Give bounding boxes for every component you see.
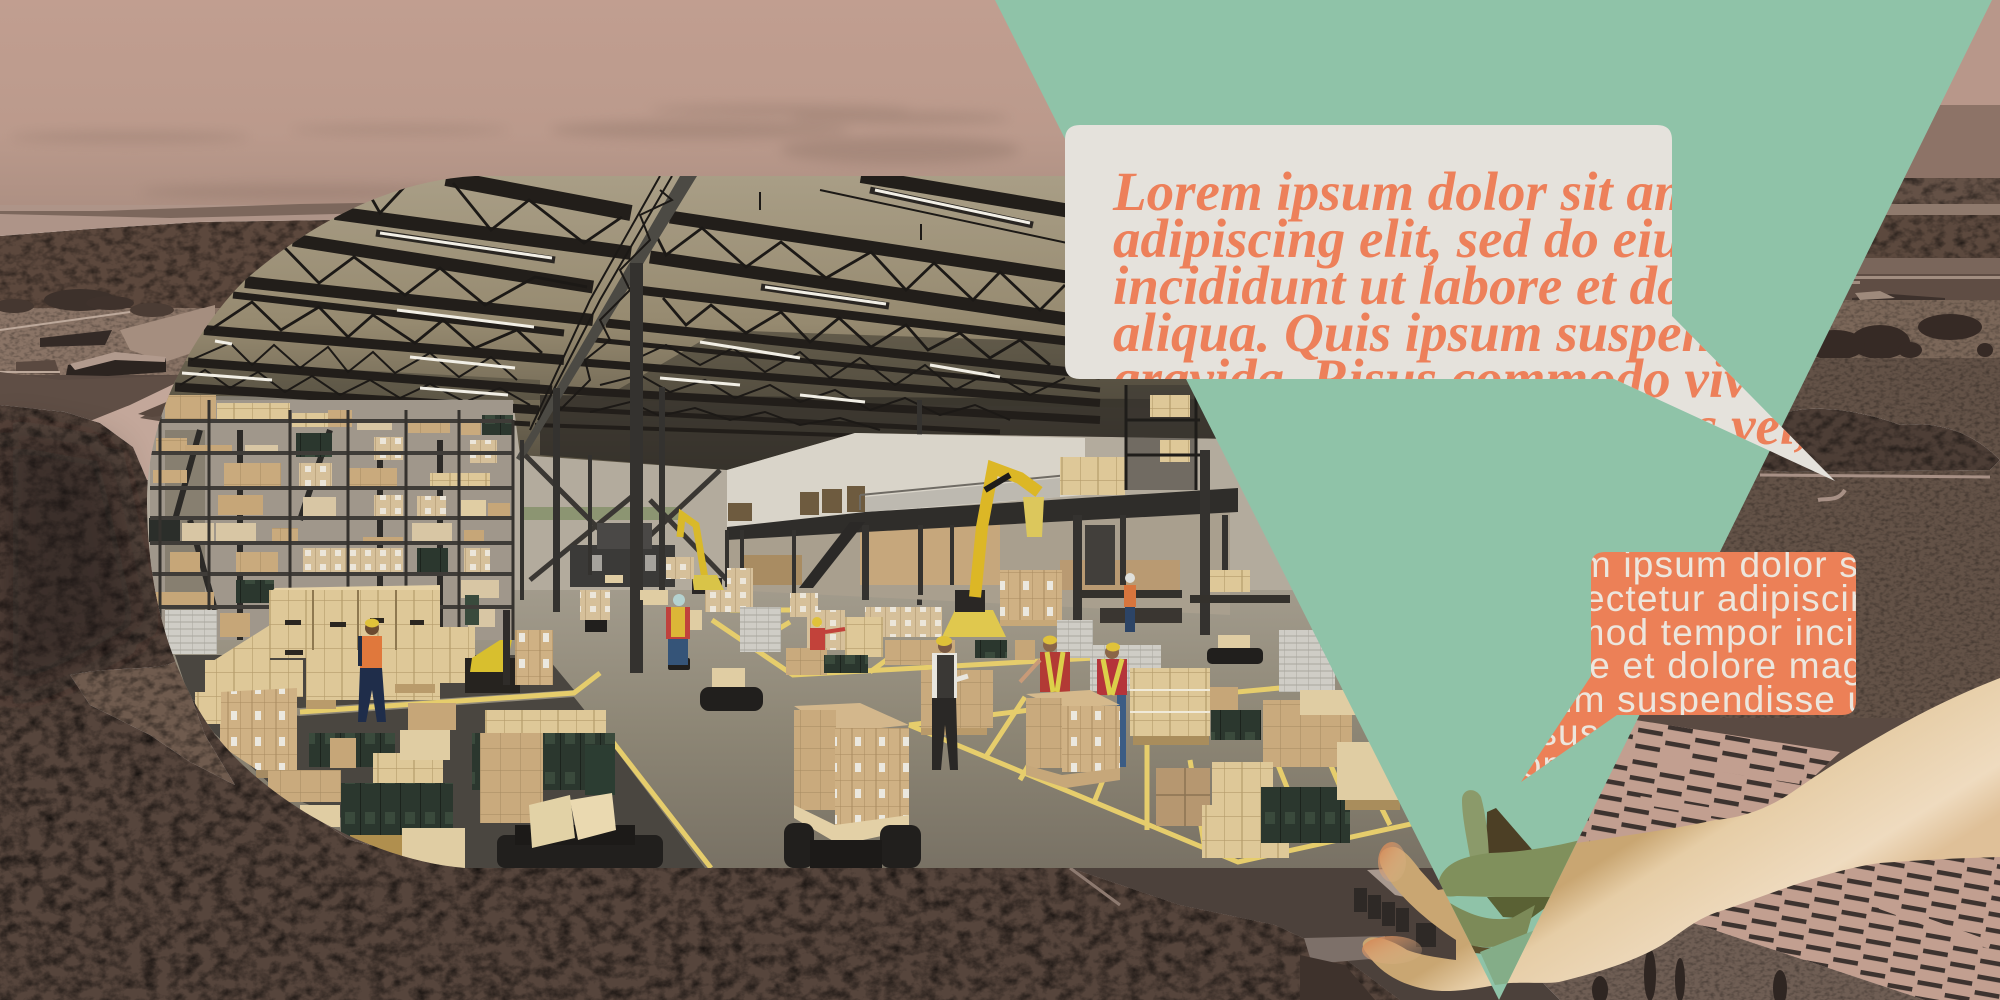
robot arm large [942,468,1044,637]
mezzanine deck [727,488,1238,540]
mezzanine lower bay [727,505,1230,615]
sky with clouds [0,0,2000,220]
left: wooded mid-ground [0,220,330,345]
back wall bracing, window strip and containers [520,455,727,587]
mezzanine wall [727,433,1085,528]
bubble serif text, clipped: adipiscing elit, sed do eiusmod tempor [1113,208,1975,269]
lower finger [1450,903,1535,947]
yellow lane edge [609,737,711,868]
left pale pallet [195,688,297,778]
bubble sans text, clipped: eiusmod tempor incididunt [1501,612,1963,653]
right: sky and hazy distance [1800,0,2000,179]
left: fields and farm buildings [0,289,260,376]
bubble serif text, clipped: aliqua. Quis ipsum suspendisse ultrices [1113,302,2000,363]
workstation tables [1080,570,1290,623]
worker with orange vest [358,618,386,722]
right: distant hills and tree lines [1800,178,2000,261]
shadow under lower finger [1462,938,1525,954]
shadow between thumb and fingers [1487,897,1560,919]
mezzanine railing and stored boxes [860,385,1200,512]
second big pallet with worker behind [1026,642,1127,788]
bubble sans text, clipped: Risus commodo [1501,712,1782,753]
right: clumps of trees [1805,314,1993,360]
bottom: yard and road with trucks [1070,868,1560,1000]
rack posts [160,400,513,640]
worker in red with yellow vest [1020,636,1070,692]
ceiling [140,176,1300,470]
rack shelves [150,421,513,607]
left and bottom: dark forest [0,405,1400,1000]
bubble sans text, clipped: Lorem ipsum dolor sit amet, [1501,544,1990,585]
raised finger [1462,790,1489,857]
back wall [147,380,1292,610]
left: lake and distant hills [0,202,420,245]
bubble sans text, clipped: ipsum suspendisse ultrices [1501,679,1974,720]
lane boxes and crates [268,703,615,868]
web of hand [1486,808,1535,862]
yellow floor markings [300,610,1420,862]
roof beams [165,176,1100,437]
left: forest clearing [70,660,235,785]
centre worker on cart [666,594,690,670]
orange speech bubble [1501,544,2000,785]
robot with cream boxes [497,793,663,868]
worker pointing [810,617,845,650]
bubble sans text, clipped: commodo viverra [1501,744,1803,785]
dark lane area [190,697,705,868]
right: scrub field [1720,358,2000,718]
bubble serif text, clipped: Lorem ipsum dolor sit amet, consectetur [1112,161,2000,222]
storage racks [149,395,513,640]
small robot far right [1207,635,1263,664]
centre crate groups [921,640,1005,735]
small robot arm [680,515,724,594]
facade trees [1592,949,1787,1000]
dark lane under pallets [175,655,574,708]
roof lights [182,190,1033,402]
stairs [799,532,857,588]
light speech bubble [1065,125,2000,481]
fingertip shading [1362,842,1422,964]
left: forest shadow [0,430,150,700]
hand seen through triangle [1438,790,1600,985]
centre pallets and sacks [740,607,1335,692]
yellow wrapped pallet [1130,668,1210,745]
column in front [640,600,643,605]
bubble sans text, clipped [1501,544,2000,785]
bubble serif text, clipped [1111,161,2000,456]
bubble serif text, clipped: accumsan lacus vel, [1355,395,1809,456]
back pallets [580,557,1062,632]
right: farm fields [1770,258,2000,360]
tracked robot under front pallet [784,823,921,868]
thumb [1438,835,1600,899]
central roof girder [516,176,697,462]
factory roof with solar panels [1540,716,2000,1000]
green triangle [995,0,1992,1000]
front-left wrapped pallets [165,585,475,709]
warehouse floor [140,590,1500,870]
forklift [465,610,553,693]
rack boxes [149,395,513,637]
manager in vest [932,636,968,770]
warehouse interior photo [140,176,1500,870]
front right boxes [1156,687,1400,858]
left: green field with pale road [0,372,200,480]
mezzanine windows [728,486,865,521]
mezzanine columns [725,450,1228,635]
tinted palm [1480,930,1535,985]
arm silhouette [1363,678,2000,991]
bottom right: factory facade [1500,905,1925,1000]
arm and hand [1362,678,2000,991]
bubble serif text, clipped: incididunt ut labore et dolore magna [1113,255,1943,316]
worker at workstation [1124,573,1136,632]
right: tree line and dirt road [1755,409,2000,500]
roof trusses [180,183,1100,430]
columns [520,263,922,673]
tall front pallet on robot [794,703,909,845]
small carrier robot [700,668,763,711]
